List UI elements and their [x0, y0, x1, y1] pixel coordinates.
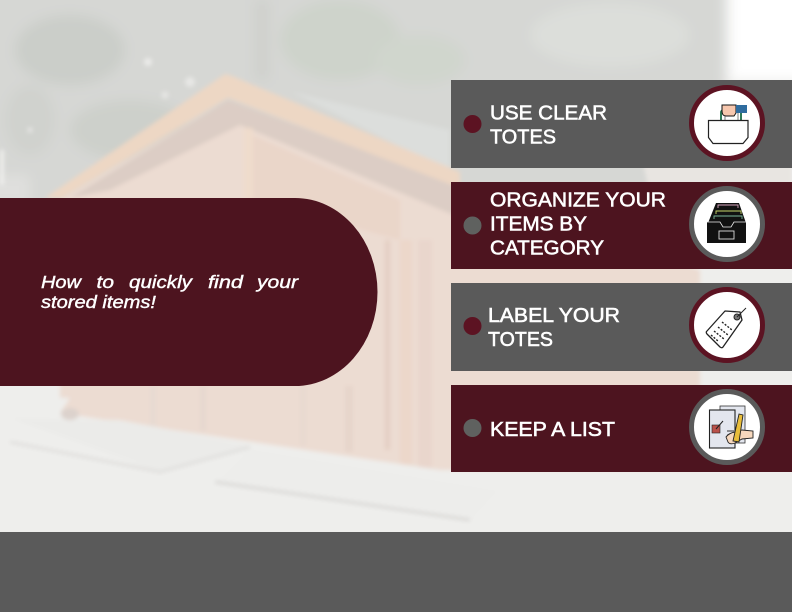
bullet	[464, 419, 482, 437]
title pill	[0, 198, 378, 386]
heading: CATEGORY	[490, 238, 604, 260]
heading: KEEP A LIST	[490, 419, 615, 441]
heading: LABEL YOUR	[488, 305, 620, 327]
wall vertical stripes	[244, 128, 253, 198]
panel: use clear totes	[451, 80, 792, 168]
heading	[490, 190, 666, 260]
title text: stored items!	[41, 292, 156, 312]
title text	[41, 272, 299, 312]
heading: TOTES	[488, 329, 553, 351]
heading	[490, 102, 607, 148]
ground slabs	[0, 396, 792, 532]
heading	[488, 305, 620, 351]
panel: keep a list	[451, 385, 792, 472]
panel: label your totes	[451, 283, 792, 371]
icon: checklist and hand with pencil	[692, 392, 762, 462]
title text: How	[41, 272, 83, 292]
bullet	[464, 115, 482, 133]
title text: find	[208, 272, 245, 292]
shadow beneath roof	[70, 100, 470, 222]
gable wall	[60, 100, 700, 470]
icon: tote bag with hand	[692, 88, 762, 158]
title text: quickly	[129, 272, 193, 292]
heading: ORGANIZE YOUR	[490, 190, 666, 212]
title text: your	[256, 272, 299, 292]
heading: TOTES	[490, 126, 556, 148]
bottom band	[0, 532, 792, 612]
icon: price tag	[692, 290, 762, 360]
icon: file drawer	[692, 188, 762, 260]
bullet	[464, 216, 482, 234]
heading: USE CLEAR	[490, 102, 607, 124]
grey roof surface	[292, 92, 450, 172]
heading: ITEMS BY	[490, 214, 587, 236]
roof barge boards	[45, 74, 460, 198]
title text: to	[96, 272, 114, 292]
trees behind shed	[0, 0, 792, 210]
bullet	[464, 317, 482, 335]
panel: organize your items by category	[451, 182, 792, 269]
